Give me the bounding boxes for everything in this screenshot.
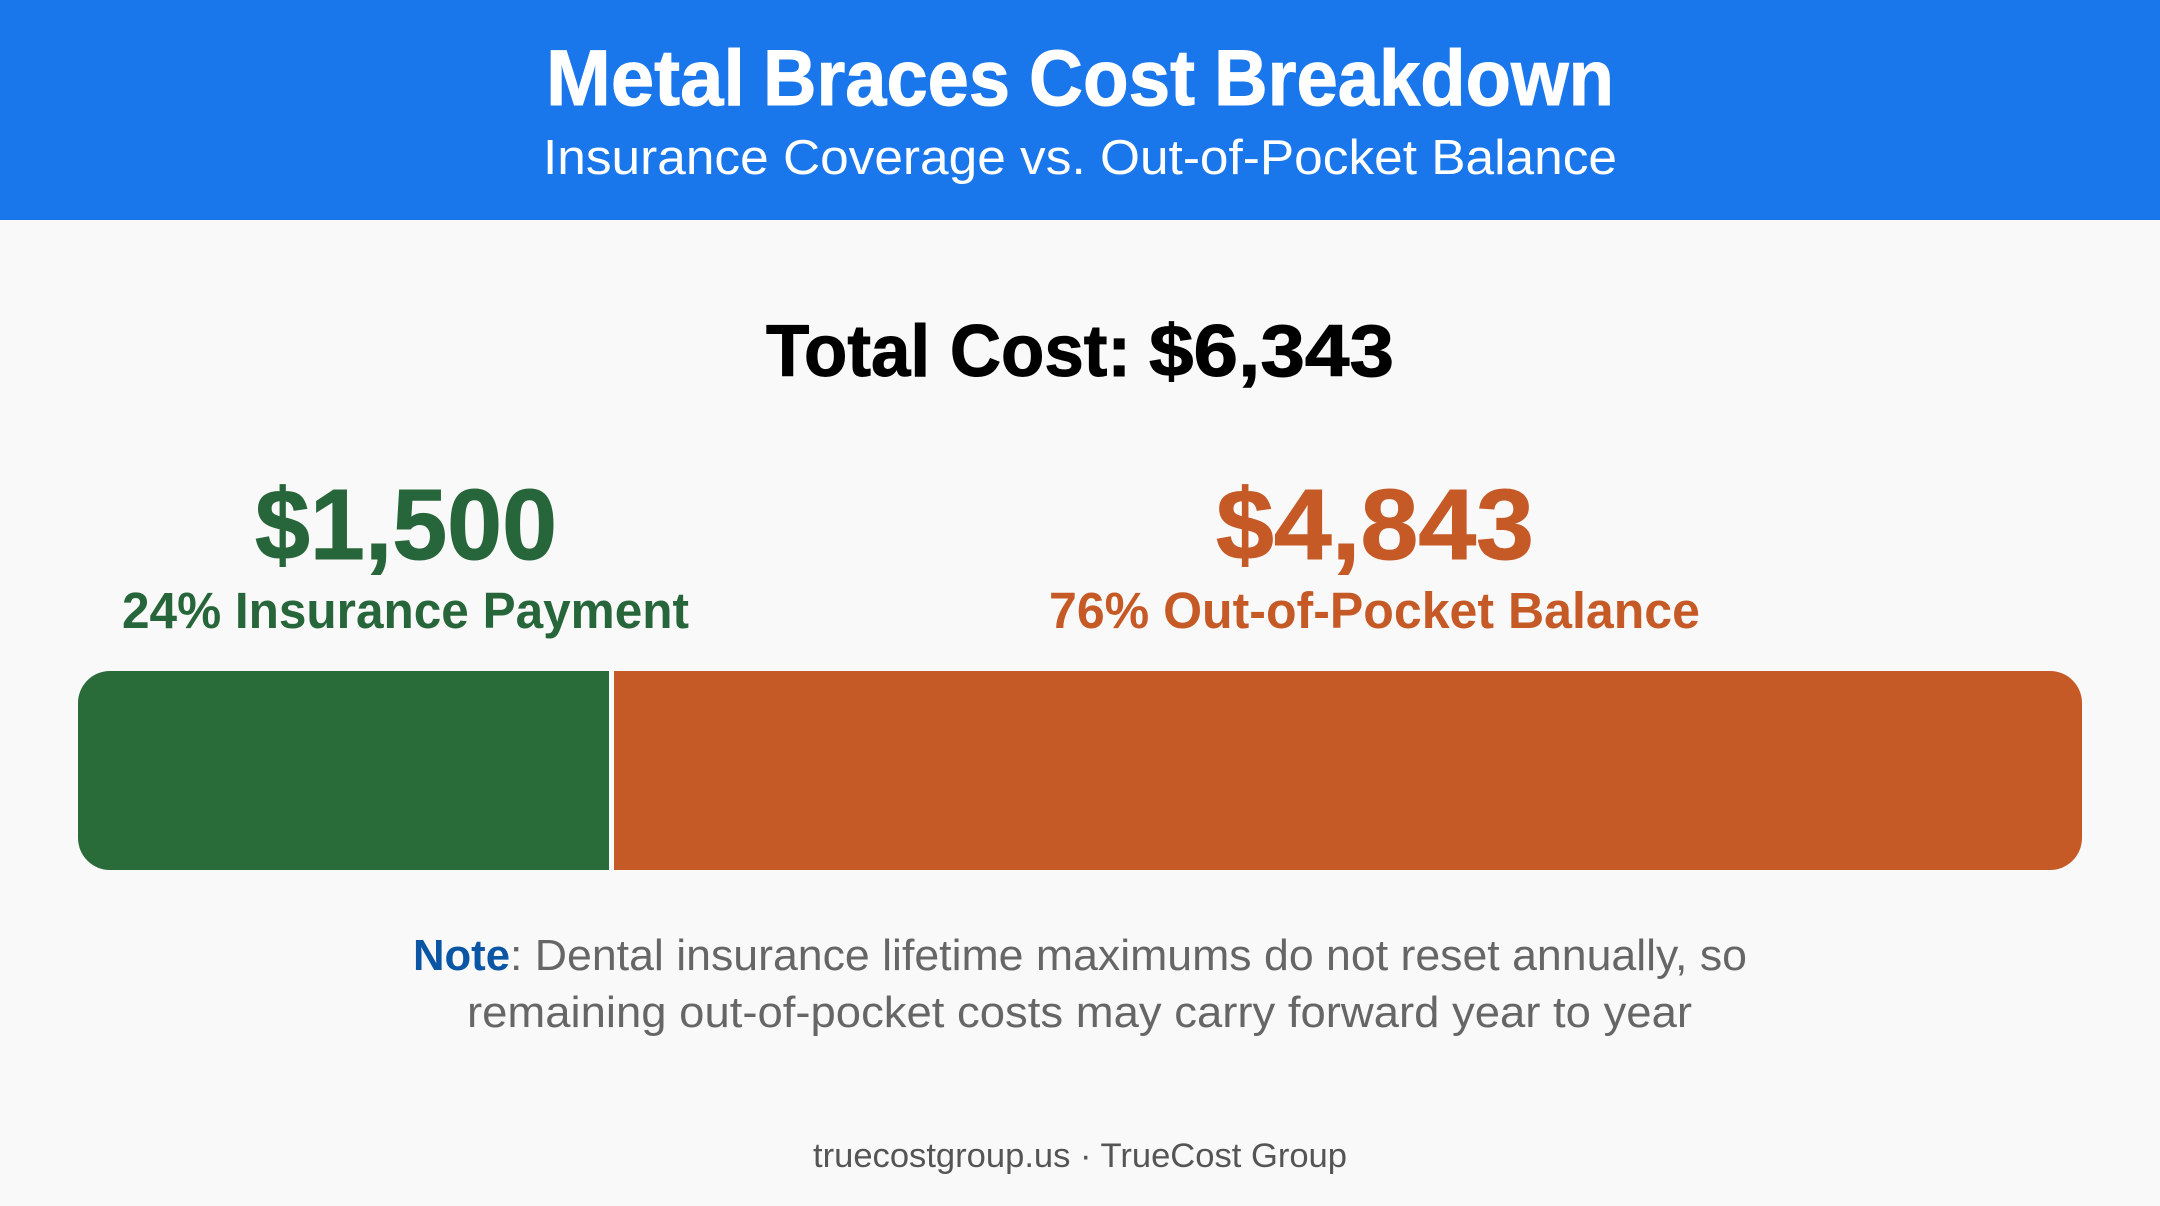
insurance amount: $1,500 <box>255 469 557 581</box>
title: Braces <box>763 33 1010 122</box>
footer source: truecostgroup.us · TrueCost Group <box>813 1137 1347 1175</box>
total cost heading <box>766 311 1394 392</box>
total cost heading: $6,343 <box>1149 311 1394 392</box>
bar segment: insurance 24% <box>78 671 609 870</box>
out-of-pocket label: 76% Out-of-Pocket Balance <box>1049 582 1700 639</box>
note text: : Dental insurance lifetime maximums do not reset annually, so <box>510 931 1747 980</box>
total cost heading: Total Cost: <box>766 311 1131 392</box>
title <box>546 33 1614 122</box>
title: Cost <box>1029 33 1195 122</box>
header banner <box>0 0 2160 220</box>
subtitle: Insurance Coverage vs. Out-of-Pocket Balance <box>543 131 1617 185</box>
note text: Note <box>413 931 510 980</box>
bar segment: out-of-pocket 76% <box>614 671 2082 870</box>
note text <box>413 931 1747 1037</box>
title: Metal <box>546 33 745 122</box>
note text: remaining out-of-pocket costs may carry forward year to year <box>467 988 1692 1037</box>
stacked cost bar <box>78 671 2082 870</box>
title: Breakdown <box>1214 33 1614 122</box>
out-of-pocket amount: $4,843 <box>1216 469 1534 581</box>
insurance label: 24% Insurance Payment <box>122 582 689 639</box>
